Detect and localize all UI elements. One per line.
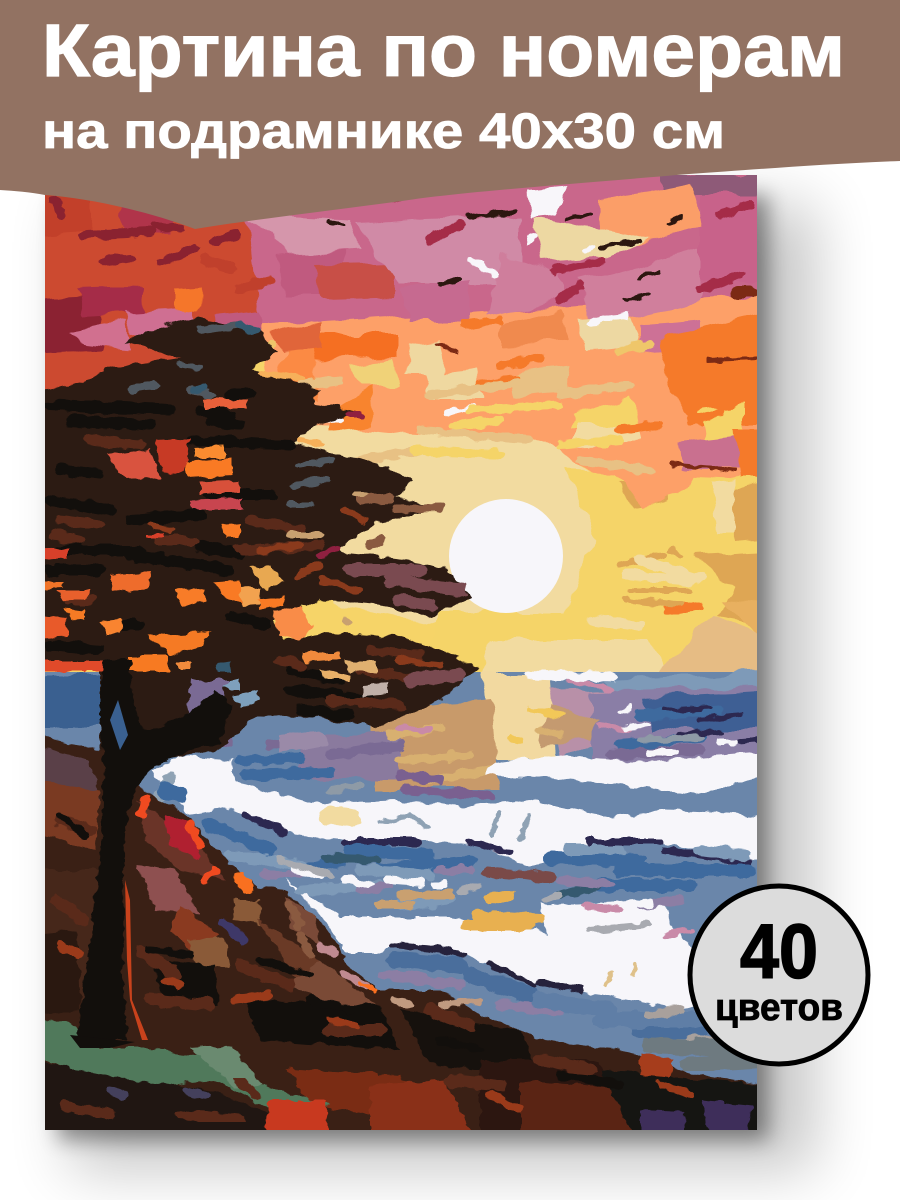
title: Картина по номерам bbox=[42, 9, 845, 92]
header ribbon bbox=[0, 0, 900, 229]
shoreline rocks bbox=[385, 945, 770, 1065]
tree trunk bbox=[78, 660, 232, 1040]
sky paint dabs bbox=[55, 178, 757, 625]
tree canopy bbox=[30, 317, 478, 760]
badge: 40 colours: цветов bbox=[715, 987, 843, 1029]
painting: sunset over the sea bbox=[30, 160, 770, 1150]
canvas shadow bbox=[58, 195, 815, 1170]
rocky cliff bbox=[30, 730, 770, 1150]
sea bbox=[30, 672, 770, 1102]
sky bbox=[30, 160, 770, 680]
badge: 40 colours: 40 bbox=[740, 909, 818, 995]
subtitle: на подрамнике 40х30 см bbox=[42, 103, 725, 159]
badge: 40 colours bbox=[690, 886, 868, 1064]
tree bbox=[30, 317, 478, 1048]
white waves bbox=[150, 752, 770, 1010]
sun bbox=[449, 499, 563, 613]
green bush bbox=[45, 1020, 330, 1130]
